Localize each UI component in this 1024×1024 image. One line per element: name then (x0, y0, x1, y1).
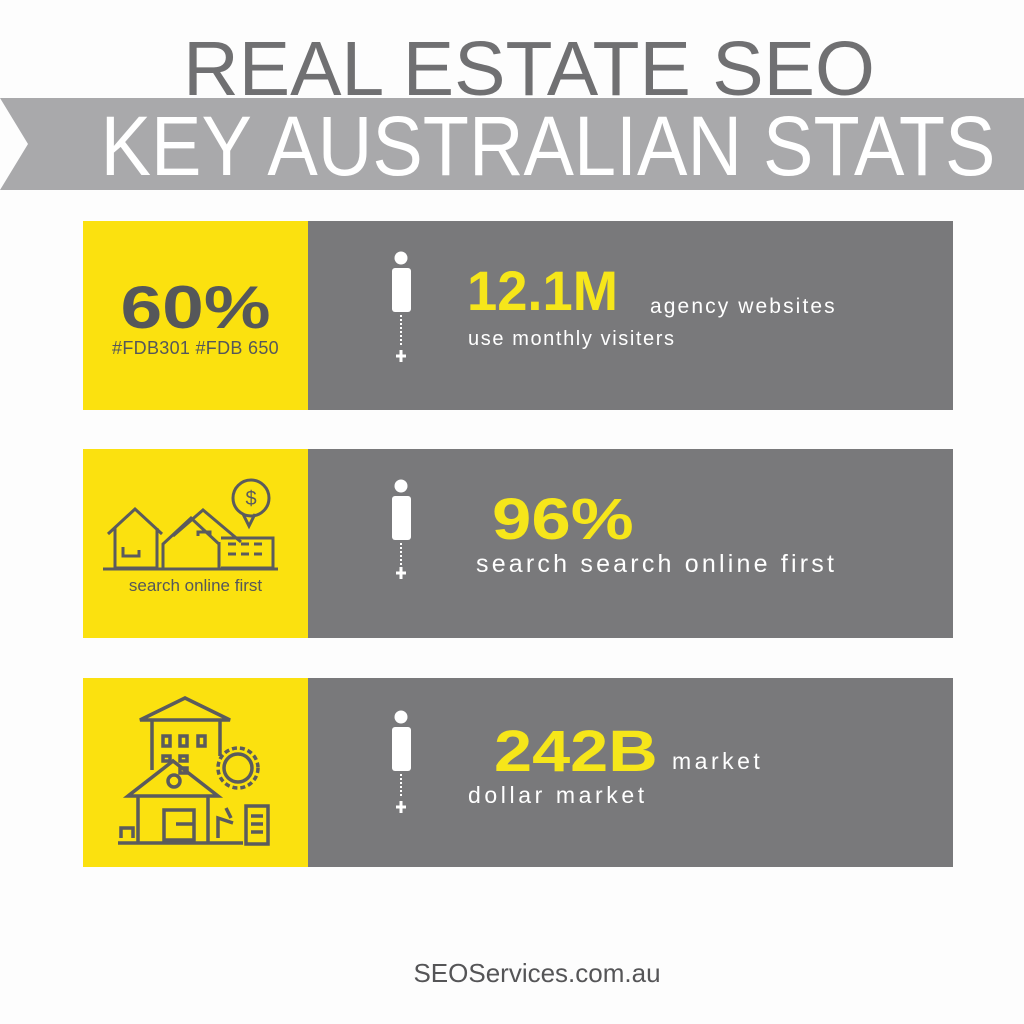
icon: buildings (118, 696, 270, 846)
yellow box 2 (83, 449, 308, 638)
icon: person (392, 710, 411, 813)
panel 2 (83, 449, 953, 638)
text use monthly visiters: use monthly visiters (468, 328, 676, 350)
banner (0, 98, 1024, 190)
text search search online first: search search online first (476, 550, 837, 578)
icon: person (392, 252, 411, 362)
panel 1 (83, 221, 953, 410)
stat 96%: 96% (492, 487, 634, 552)
caption hex codes: #FDB301 #FDB 650 (112, 338, 279, 358)
panel 3 (83, 678, 953, 867)
yellow box 1 (83, 221, 308, 410)
stat 60%: 60% (120, 274, 271, 341)
stat 12.1M: 12.1M (467, 259, 618, 322)
text dollar market: dollar market (468, 782, 648, 808)
text agency websites: agency websites (650, 295, 837, 318)
stat 242B: 242B (494, 719, 658, 784)
icon: person (392, 480, 411, 579)
icon: houses with dollar (103, 478, 278, 570)
icon: houses with dollar: $ (245, 488, 257, 510)
yellow box 3 (83, 678, 308, 867)
footer: SEOServices.com.au (413, 958, 661, 988)
caption search online first: search online first (129, 576, 262, 595)
title: real estate seo: REAL ESTATE SEO (183, 26, 875, 112)
text market: market (672, 748, 763, 774)
